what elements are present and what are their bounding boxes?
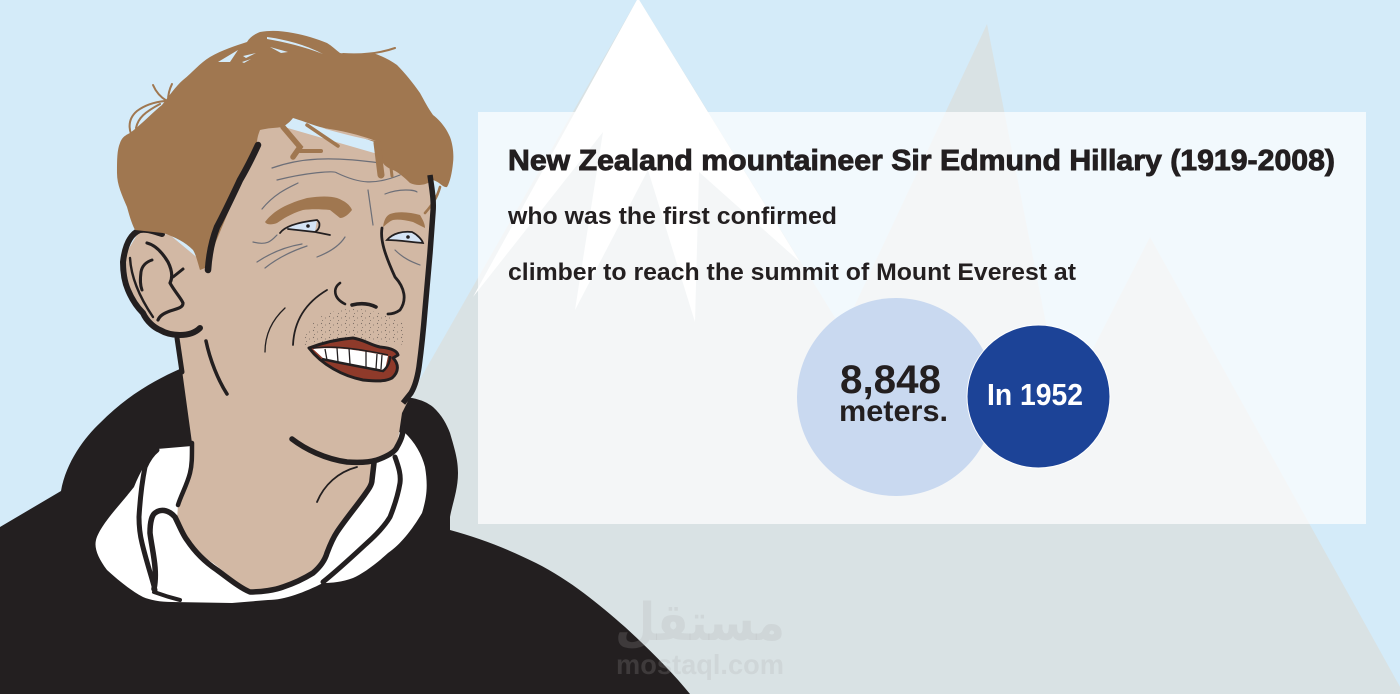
skin — [125, 120, 433, 590]
mouth — [309, 338, 398, 381]
hair gaps — [218, 37, 323, 63]
neck and collar outlines — [139, 338, 400, 600]
jaw line — [292, 428, 403, 462]
body line one: who was the first confirmed — [507, 203, 837, 230]
text panel — [478, 112, 1366, 524]
nose — [335, 228, 404, 314]
snow cap — [473, 0, 800, 322]
forehead sliver — [322, 128, 376, 141]
portrait of Hillary — [0, 31, 690, 694]
circle: year: In 1952 — [987, 377, 1083, 412]
jacket — [0, 368, 690, 694]
eyebrows — [265, 196, 425, 228]
circle: height: 8,848 — [840, 358, 941, 402]
hairline to temple — [208, 145, 258, 270]
cheek lines — [206, 290, 357, 502]
watermark — [615, 593, 785, 680]
right eye — [387, 232, 423, 243]
body line two: climber to reach the summit of Mount Everest at — [508, 259, 1076, 286]
white collar — [95, 432, 427, 603]
heading: New Zealand mountaineer Sir Edmund Hillary (1919-2008) — [508, 145, 1335, 177]
watermark arabic wordmark: مستقل — [615, 593, 785, 653]
circle: height: meters. — [839, 395, 948, 428]
watermark latin wordmark: mostaql.com — [616, 649, 784, 680]
hair — [117, 31, 453, 270]
circle: height — [797, 298, 995, 496]
right face contour — [403, 175, 433, 403]
hair strands — [130, 48, 440, 213]
stubble — [304, 309, 405, 345]
face wrinkles — [253, 159, 420, 268]
ear — [123, 230, 200, 335]
left eye — [280, 220, 330, 235]
circle: year — [967, 325, 1110, 468]
